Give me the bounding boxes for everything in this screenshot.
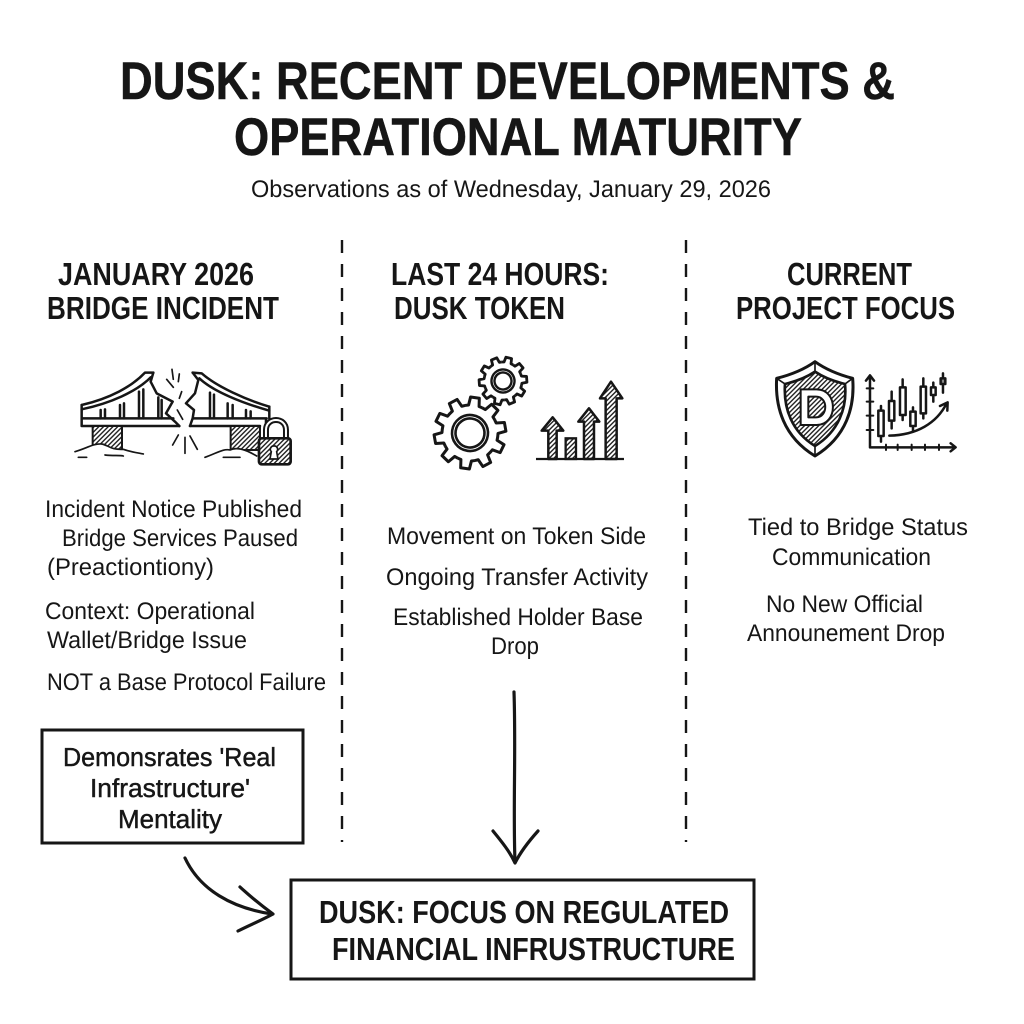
- icon: candlestick chart: [866, 373, 956, 451]
- subtitle: Observations as of Wednesday, January 29, 2026: [251, 176, 771, 203]
- icon: broken bridge with padlock: [75, 369, 291, 464]
- callout: real infrastructure mentality: [42, 730, 303, 843]
- heading: dusk token: LAST 24 HOURS:: [391, 256, 609, 292]
- title: DUSK: RECENT DEVELOPMENTS &: [120, 52, 895, 111]
- conclusion box: DUSK: FOCUS ON REGULATED: [319, 894, 729, 930]
- incident list: Incident Notice Published: [45, 496, 302, 523]
- heading: bridge incident: [47, 256, 279, 326]
- panel: current project focus: [736, 256, 968, 647]
- token list: Drop: [491, 633, 539, 660]
- incident list: Context: Operational: [45, 598, 255, 625]
- focus list: [747, 514, 968, 647]
- arrow: token column to conclusion: [493, 692, 538, 863]
- token list: Established Holder Base: [393, 604, 643, 631]
- focus list: Tied to Bridge Status: [748, 514, 968, 541]
- callout: real infrastructure mentality: Mentality: [118, 804, 222, 834]
- token list: Ongoing Transfer Activity: [386, 564, 648, 591]
- incident list: (Preactiontiony): [47, 554, 214, 581]
- heading: bridge incident: BRIDGE INCIDENT: [47, 290, 279, 326]
- token list: [386, 523, 648, 660]
- icon: rising arrows chart: [536, 382, 624, 459]
- incident list: Bridge Services Paused: [62, 525, 298, 552]
- incident list: Wallet/Bridge Issue: [47, 627, 247, 654]
- callout: real infrastructure mentality: Infrastructure': [90, 773, 250, 803]
- incident list: [45, 496, 326, 696]
- conclusion box: FINANCIAL INFRUSTRUCTURE: [332, 931, 735, 967]
- panel: last 24 hours DUSK token: [386, 256, 648, 660]
- heading: project focus: CURRENT: [787, 256, 912, 292]
- conclusion box: [291, 880, 754, 979]
- heading: dusk token: [391, 256, 609, 326]
- focus list: Communication: [772, 544, 931, 571]
- incident list: NOT a Base Protocol Failure: [47, 669, 326, 696]
- icon: shield with letter D: [776, 362, 853, 456]
- title: [120, 52, 895, 167]
- token list: Movement on Token Side: [387, 523, 646, 550]
- heading: dusk token: DUSK TOKEN: [394, 290, 565, 326]
- focus list: No New Official: [766, 591, 923, 618]
- callout: real infrastructure mentality: Demonsrates 'Real: [63, 742, 276, 772]
- arrow: callout to conclusion: [185, 858, 273, 931]
- heading: project focus: [736, 256, 955, 326]
- title: OPERATIONAL MATURITY: [234, 108, 802, 167]
- icon: gears: [429, 352, 532, 473]
- heading: bridge incident: JANUARY 2026: [58, 256, 254, 292]
- heading: project focus: PROJECT FOCUS: [736, 290, 955, 326]
- focus list: Announement Drop: [747, 620, 945, 647]
- panel: January 2026 bridge incident: [42, 256, 326, 843]
